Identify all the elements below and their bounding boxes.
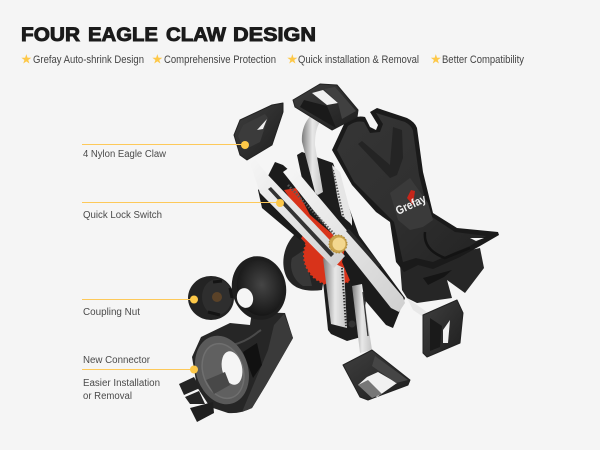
callout: Quick Lock Switch: Quick Lock Switch [83, 210, 162, 221]
feature: installation: ★ [286, 52, 298, 68]
feature: protection: ★ [152, 52, 163, 68]
plate centre panel [390, 178, 433, 230]
curved arm to top claw [302, 115, 323, 196]
feature: compatibility: ★ [430, 52, 442, 68]
feature: compatibility: Better Compatibility [442, 54, 524, 66]
feature: auto-shrink: Grefay Auto-shrink Design [33, 54, 144, 66]
connector body [179, 312, 293, 422]
title [21, 24, 316, 46]
callout: 4 Nylon Eagle Claw [82, 141, 249, 160]
black lock frame left [258, 184, 305, 240]
callout: Coupling Nut [82, 296, 198, 318]
suction cup [226, 251, 292, 325]
callout: New Connector: or Removal [83, 391, 132, 402]
rear lower body [321, 262, 366, 341]
lower plate wing [400, 248, 484, 303]
serrated strip lower [323, 258, 347, 328]
title: DESIGN [233, 24, 316, 46]
grey bar liner [186, 329, 258, 411]
title: FOUR [21, 24, 80, 46]
arm slot upper [346, 229, 381, 267]
callout: Coupling Nut: Coupling Nut [83, 307, 140, 318]
callout: Quick Lock Switch [82, 199, 284, 221]
plate Y recess [358, 127, 403, 178]
lower vertical strip [352, 284, 372, 353]
arm serration [288, 185, 335, 235]
feature: protection [152, 52, 276, 68]
arm slot [268, 187, 334, 257]
plate logo accent [407, 190, 415, 205]
claw: bottom right [423, 300, 463, 357]
black lock frame upper [267, 162, 363, 257]
main black plate [332, 108, 499, 272]
claw: bottom [343, 350, 410, 400]
feature: installation: Quick installation & Removal [298, 54, 419, 66]
black lock frame right [342, 223, 405, 328]
lower front arm [250, 157, 345, 268]
feature: installation [286, 52, 419, 68]
plate lower groove [425, 232, 470, 258]
connector knob [190, 402, 214, 422]
feature: compatibility [430, 52, 524, 68]
white link to lower right claw [407, 298, 427, 316]
callout: New Connector: New Connector [83, 355, 151, 366]
red detail upper [284, 188, 310, 215]
rear upper frame [297, 152, 360, 262]
serrated strip upper [332, 165, 352, 232]
connector clamp tabs [179, 377, 200, 395]
wing highlight [470, 238, 484, 241]
title: CLAW [166, 24, 227, 46]
plate logo: Grefay [393, 191, 429, 218]
red gear [274, 186, 364, 285]
right black strip over gear [352, 226, 378, 275]
callout: New Connector [82, 355, 198, 402]
phone holder: exploded product [179, 84, 499, 422]
feature: auto-shrink: ★ [20, 52, 32, 68]
title: EAGLE [88, 24, 158, 46]
gold lock screw [329, 235, 347, 253]
ball joint [283, 233, 330, 291]
callout: 4 Nylon Eagle Claw: 4 Nylon Eagle Claw [83, 149, 167, 160]
feature: auto-shrink [20, 52, 144, 68]
upper front arm [283, 167, 405, 312]
feature list [20, 52, 524, 68]
callout: New Connector: Easier Installation [83, 378, 160, 389]
claw: top [293, 84, 358, 130]
claw: upper left [234, 103, 283, 160]
coupling nut [188, 276, 234, 320]
feature: protection: Comprehensive Protection [164, 54, 276, 66]
